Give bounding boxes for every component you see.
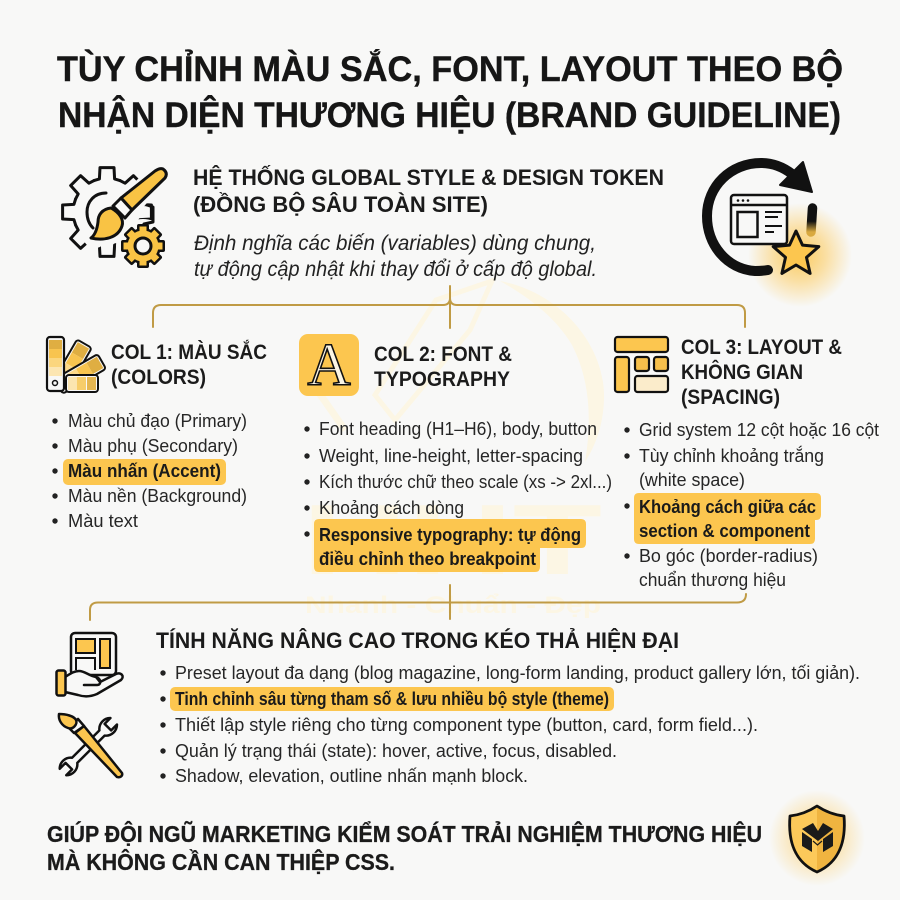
heading: col 2	[374, 343, 512, 391]
list: col 3 items	[624, 420, 879, 590]
global style description: Định nghĩa các biến (variables) dùng chung,	[194, 232, 596, 255]
list: col 3 items: Grid system 12 cột hoặc 16 cột	[639, 420, 879, 440]
list: col 3 items: (white space)	[639, 470, 745, 490]
icon: letter A: A	[307, 332, 351, 398]
icon: hand holding layout	[56, 633, 123, 696]
global style heading	[193, 164, 664, 217]
list: col 1 items	[52, 411, 247, 531]
list: col 1 items: Màu text	[68, 511, 138, 531]
title: NHẬN DIỆN THƯƠNG HIỆU (BRAND GUIDELINE)	[58, 95, 841, 135]
list: advanced features: Shadow, elevation, outline nhấn mạnh block.	[175, 766, 528, 786]
panel: col 2 typography	[299, 332, 612, 572]
list: advanced features: Preset layout đa dạng (blog magazine, long-form landing, product gallery lớn, tối giản).	[175, 663, 860, 683]
list: advanced features	[160, 663, 860, 786]
heading: col 2: COL 2: FONT &	[374, 343, 512, 366]
list: advanced features: Tinh chỉnh sâu từng tham số & lưu nhiều bộ style (theme)	[175, 689, 609, 709]
footer statement: GIÚP ĐỘI NGŨ MARKETING KIỂM SOÁT TRẢI NGHIỆM THƯƠNG HIỆU	[47, 819, 762, 847]
heading: col 3: COL 3: LAYOUT &	[681, 336, 842, 359]
list: col 2 items: Khoảng cách dòng	[319, 498, 464, 518]
icon: wrench and paintbrush	[57, 714, 122, 778]
connector: lower bracket	[90, 585, 746, 620]
global style heading: (ĐỒNG BỘ SÂU TOÀN SITE)	[193, 192, 488, 217]
heading: col 1: COL 1: MÀU SẮC	[111, 340, 267, 364]
list: col 3 items: Bo góc (border-radius)	[639, 546, 818, 566]
list: col 3 items: Tùy chỉnh khoảng trắng	[639, 445, 824, 466]
global style description	[194, 232, 597, 281]
panel: col 1 colors	[47, 337, 267, 531]
list: col 3 items: Khoảng cách giữa các	[639, 497, 816, 517]
list: col 3 items: section & component	[639, 521, 810, 541]
list: col 1 items: Màu nền (Background)	[68, 486, 247, 506]
global style description: tự động cập nhật khi thay đổi ở cấp độ global.	[194, 258, 597, 281]
heading: col 1: (COLORS)	[111, 366, 206, 389]
panel: col 3 layout	[615, 336, 879, 590]
title: TÙY CHỈNH MÀU SẮC, FONT, LAYOUT THEO BỘ	[57, 49, 843, 89]
connector: top bracket	[153, 286, 745, 328]
icon: color swatches	[47, 337, 106, 394]
icon: M shield logo	[769, 790, 865, 886]
heading: col 1	[111, 340, 267, 389]
list: col 3 items: chuẩn thương hiệu	[639, 570, 786, 590]
list: col 1 items: Màu chủ đạo (Primary)	[68, 411, 247, 431]
heading: col 3: KHÔNG GIAN	[681, 360, 803, 384]
list: col 1 items: Màu phụ (Secondary)	[68, 436, 238, 456]
footer statement: MÀ KHÔNG CẦN CAN THIỆP CSS.	[47, 848, 395, 875]
icon: refresh window and star	[707, 162, 852, 307]
list: col 2 items: Responsive typography: tự động	[319, 525, 581, 545]
heading: col 3: (SPACING)	[681, 386, 780, 409]
watermark logo	[302, 281, 604, 619]
list: col 2 items: Weight, line-height, letter-spacing	[319, 446, 583, 466]
heading: advanced features: TÍNH NĂNG NÂNG CAO TRONG KÉO THẢ HIỆN ĐẠI	[156, 628, 679, 653]
list: col 2 items: điều chỉnh theo breakpoint	[319, 549, 536, 569]
watermark logo: HHT	[302, 484, 602, 596]
list: col 2 items: Font heading (H1–H6), body, button	[319, 419, 597, 439]
watermark logo: Nhanh - Chuẩn - Đẹp	[305, 592, 601, 619]
heading: col 3	[681, 336, 842, 409]
list: advanced features: Quản lý trạng thái (state): hover, active, focus, disabled.	[175, 741, 617, 761]
title	[57, 49, 843, 135]
footer statement	[47, 819, 762, 875]
list: col 2 items	[304, 419, 612, 572]
icon: gear and paintbrush	[63, 168, 170, 273]
list: col 1 items: Màu nhấn (Accent)	[68, 461, 221, 481]
list: col 2 items: Kích thước chữ theo scale (xs -> 2xl...)	[319, 472, 612, 492]
icon: layout grid	[615, 337, 668, 392]
global style heading: HỆ THỐNG GLOBAL STYLE & DESIGN TOKEN	[193, 164, 664, 190]
heading: col 2: TYPOGRAPHY	[374, 368, 510, 391]
list: advanced features: Thiết lập style riêng cho từng component type (button, card, form field...).	[175, 715, 758, 735]
